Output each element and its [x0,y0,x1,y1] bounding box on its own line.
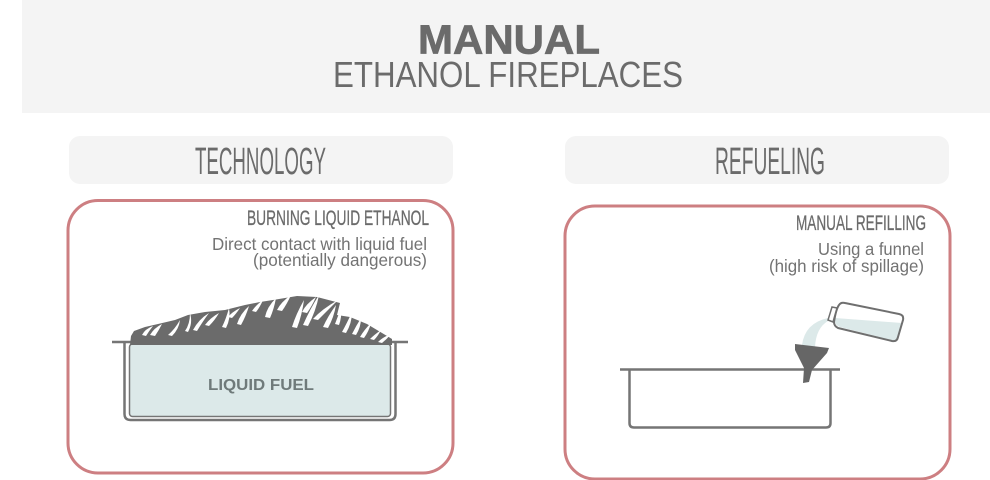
refueling description: (high risk of spillage) [769,256,924,276]
subtitle: ETHANOL FIREPLACES [333,54,683,95]
heading: refueling: REFUELING [715,141,825,183]
refueling description: Using a funnel [818,239,924,259]
technology description: Direct contact with liquid fuel [212,234,427,254]
refueling description [769,239,924,276]
icon: flames [130,295,392,345]
header band [22,0,990,113]
panel: technology [68,136,453,473]
technology description [212,234,427,270]
technology description: (potentially dangerous) [253,250,427,270]
technology card border [68,200,453,473]
empty burner tank [620,370,840,428]
icon: bottle [828,303,903,341]
label: liquid fuel: LIQUID FUEL [208,377,314,394]
icon: fuel stream [802,318,828,347]
icon: funnel [795,344,829,383]
heading: technology: TECHNOLOGY [195,141,326,183]
heading: refueling [565,136,949,184]
refueling card border [565,206,950,479]
technology card heading: BURNING LIQUID ETHANOL [247,206,429,230]
panel: refueling [565,136,950,479]
burner tank with liquid fuel [112,342,408,420]
title: MANUAL [418,16,600,62]
heading: technology [69,136,453,184]
